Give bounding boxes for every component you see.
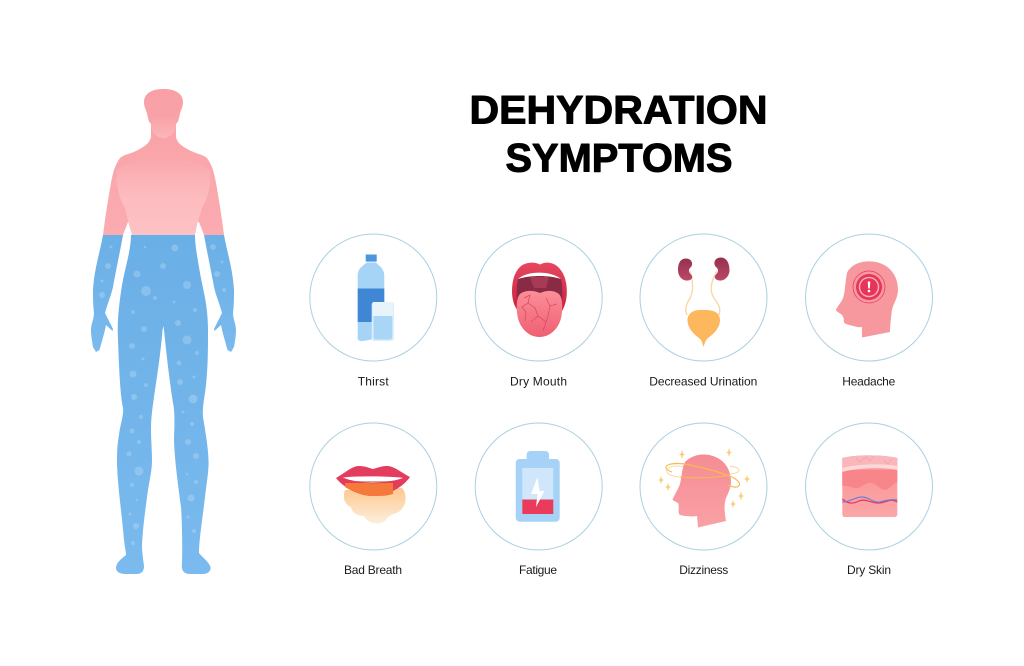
label: dry skin: Dry Skin	[847, 563, 891, 577]
icon: kidneys and bladder	[678, 258, 730, 347]
label: dry mouth: Dry Mouth	[510, 374, 567, 388]
label: headache: Headache	[842, 374, 896, 388]
label: thirst: Thirst	[358, 374, 389, 388]
icon: low battery	[516, 451, 560, 522]
water bubbles	[99, 244, 226, 545]
label: dizziness: Dizziness	[679, 563, 728, 577]
title: DEHYDRATION	[470, 88, 768, 132]
title	[470, 88, 768, 180]
torso lighter panel	[117, 158, 210, 235]
face	[151, 118, 176, 138]
body figure	[91, 89, 236, 574]
label: fatigue: Fatigue	[519, 563, 557, 577]
lower body: hydrated blue	[91, 235, 236, 574]
upper body: dehydrated pink	[103, 89, 224, 235]
label: bad breath: Bad Breath	[344, 563, 402, 577]
icon: skin cross-section	[842, 455, 897, 517]
icon: water bottle and glass	[358, 254, 394, 341]
panel: dry skin	[806, 423, 932, 577]
icon: lips with bad breath cloud	[336, 466, 410, 523]
title: SYMPTOMS	[506, 136, 732, 180]
panel: bad breath	[310, 423, 437, 577]
icon: head with pain alert	[836, 261, 898, 338]
panel: decreased urination	[640, 234, 767, 388]
panel: dizziness	[640, 423, 767, 577]
panel: fatigue	[475, 423, 602, 577]
icon: dry tongue in open mouth	[512, 263, 567, 337]
label: decreased urination: Decreased Urination	[649, 374, 757, 388]
icon: dizzy head with rings and sparkles	[658, 448, 750, 528]
panel: thirst	[310, 234, 437, 388]
panel: headache	[806, 234, 932, 388]
panel: dry mouth	[475, 234, 602, 388]
